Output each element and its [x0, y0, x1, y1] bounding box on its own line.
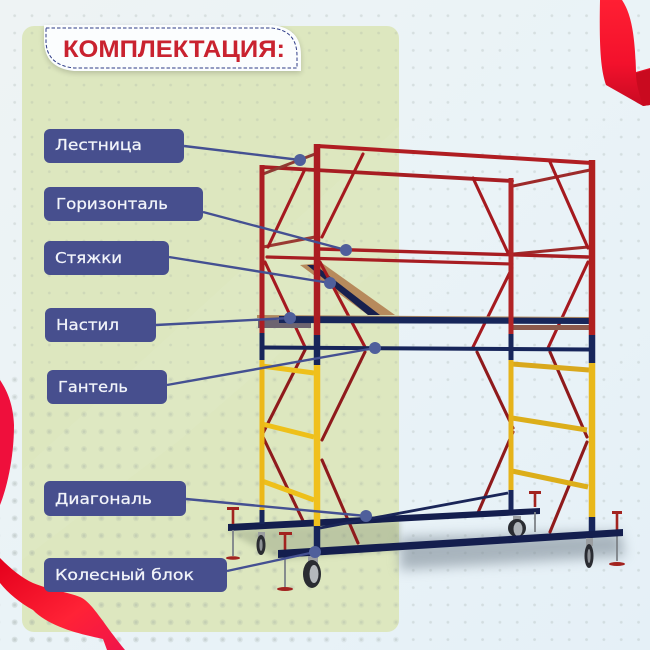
- callout: Настил: Настил: [56, 316, 119, 334]
- callout: Горизонталь: Горизонталь: [56, 195, 168, 213]
- back base beam: [228, 508, 540, 531]
- adjustable jacks: [226, 491, 625, 591]
- callout: Колесный блок: [44, 546, 321, 592]
- callout: Настил: [45, 308, 296, 342]
- callout: Стяжки: [44, 241, 336, 289]
- callout: Лестница: [44, 129, 306, 166]
- diagonal brace: [320, 493, 508, 528]
- rear wheels: [256, 516, 526, 555]
- back rails: [262, 154, 590, 264]
- callout: Гантель: Гантель: [58, 378, 128, 396]
- title badge: [44, 25, 301, 73]
- scaffold tower: [226, 144, 625, 591]
- yellow rungs: [262, 364, 589, 500]
- raised deck board: [300, 263, 395, 315]
- front top rail: [317, 146, 592, 163]
- deck platform: [257, 315, 589, 352]
- callout: Диагональ: Диагональ: [55, 490, 152, 508]
- callout: Гантель: [47, 342, 381, 404]
- front base beam: [278, 529, 623, 558]
- front wheels: [303, 538, 594, 588]
- uprights: [262, 144, 592, 552]
- shadow under base: [225, 520, 625, 570]
- callout: Лестница: Лестница: [55, 136, 142, 154]
- callout: Горизонталь: [44, 187, 352, 256]
- callout: Стяжки: Стяжки: [55, 249, 122, 267]
- ribbon: bottom left: [0, 380, 125, 650]
- diagonals: [263, 154, 588, 543]
- callout: Колесный блок: Колесный блок: [55, 566, 194, 584]
- ribbon: top right: [600, 0, 650, 106]
- title: КОМПЛЕКТАЦИЯ:: [63, 36, 285, 63]
- panel: green backdrop: [0, 26, 399, 650]
- callout: Диагональ: [44, 481, 372, 522]
